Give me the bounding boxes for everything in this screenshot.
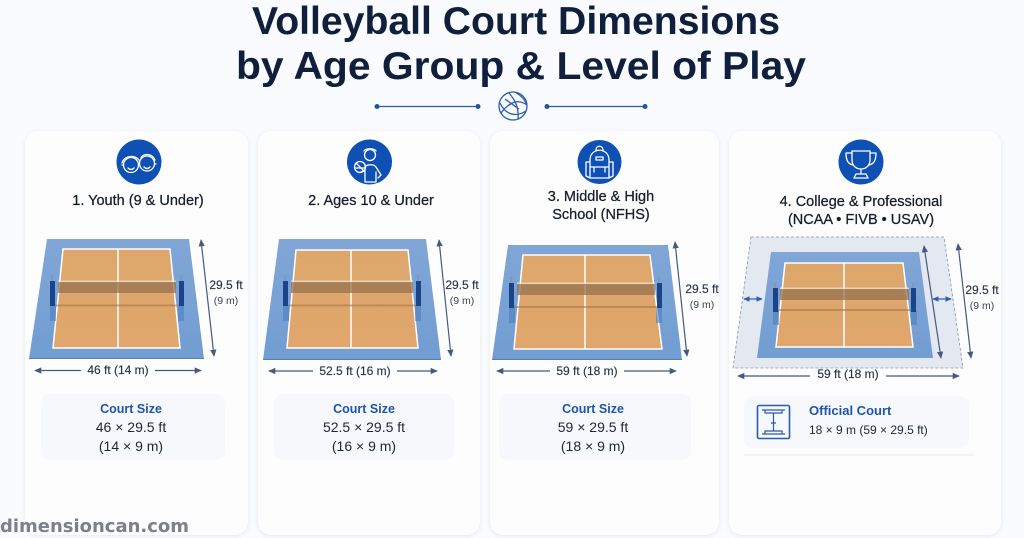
title: by Age Group & Level of Play: [236, 45, 806, 88]
title: [236, 0, 806, 88]
icon: two kids: [116, 140, 162, 184]
height dimensions: 29.5 ft: [965, 283, 999, 297]
icon: trophy: [838, 140, 884, 184]
panel: college and professional: [729, 131, 1001, 535]
court size box: 59 × 29.5 ft: [558, 419, 628, 435]
faint divider: [744, 454, 975, 456]
heading: [780, 194, 942, 228]
court diagram with free zone: [733, 237, 963, 368]
heading: 2. Ages 10 & Under: [308, 193, 434, 209]
heading: (NCAA • FIVB • USAV): [788, 212, 934, 228]
watermark: dimensioncan.com: [0, 516, 189, 537]
height dimension: (9 m): [450, 295, 474, 307]
heading: 4. College & Professional: [780, 194, 942, 210]
height dimension: (9 m): [690, 299, 714, 311]
title: Volleyball Court Dimensions: [252, 0, 780, 43]
height dimension: 29.5 ft: [209, 278, 243, 292]
heading: 1. Youth (9 & Under): [72, 193, 204, 209]
height dimension: [439, 240, 479, 356]
court size box: [499, 394, 691, 460]
panel card: [25, 131, 248, 535]
court size box: (16 × 9 m): [332, 438, 396, 454]
court size box: Court Size: [562, 402, 624, 416]
panel: middle and high school: [490, 131, 719, 535]
court size box: [41, 394, 225, 460]
court size box: [274, 394, 454, 460]
panel: youth: [25, 131, 248, 535]
height dimensions: [924, 244, 999, 358]
heading: 3. Middle & High: [548, 189, 654, 205]
court diagram: [29, 239, 204, 359]
official court box: [744, 396, 969, 448]
icon: backpack: [578, 140, 622, 184]
court size box: 46 × 29.5 ft: [96, 419, 166, 435]
width dimension: 59 ft (18 m): [817, 367, 879, 381]
court size box: Court Size: [100, 402, 162, 416]
court size box: 52.5 × 29.5 ft: [323, 419, 405, 435]
official court box: Official Court: [809, 403, 892, 418]
court size box: Court Size: [333, 402, 395, 416]
height dimension: [675, 242, 719, 356]
panel card: [258, 131, 480, 535]
free zone arrows: [744, 298, 951, 300]
court diagram: [492, 245, 682, 360]
panel: ages 10 and under: [258, 131, 480, 535]
panel card: [729, 131, 1001, 535]
height dimensions: (9 m): [970, 300, 994, 312]
height dimension: (9 m): [214, 295, 238, 307]
width dimension: 52.5 ft (16 m): [319, 364, 391, 378]
court size box: (18 × 9 m): [561, 438, 625, 454]
width dimension: 46 ft (14 m): [87, 363, 149, 377]
official court box: 18 × 9 m (59 × 29.5 ft): [809, 423, 928, 437]
heading: School (NFHS): [552, 207, 650, 223]
height dimension: [201, 240, 243, 356]
court size box: (14 × 9 m): [99, 438, 163, 454]
icon: court plan: [758, 406, 790, 438]
height dimension: 29.5 ft: [445, 278, 479, 292]
panel card: [490, 131, 719, 535]
heading: [548, 189, 654, 223]
court diagram: [263, 239, 441, 360]
title divider with volleyball icon: [374, 92, 648, 120]
icon: player with ball: [347, 140, 392, 184]
width dimension: 59 ft (18 m): [556, 364, 618, 378]
height dimension: 29.5 ft: [685, 282, 719, 296]
